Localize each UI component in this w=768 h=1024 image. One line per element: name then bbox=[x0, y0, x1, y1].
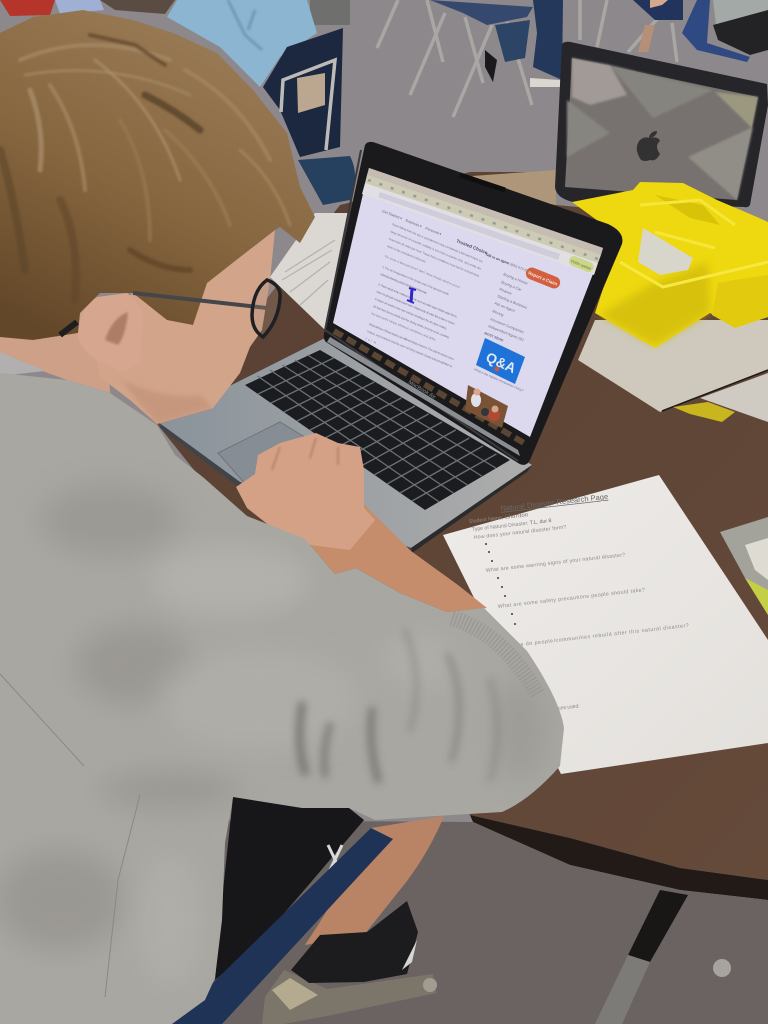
sleeve cuff ribbing bbox=[452, 618, 538, 695]
icon: apple logo bbox=[637, 131, 660, 161]
black shorts bbox=[215, 797, 364, 980]
gray hoodie bbox=[0, 373, 564, 1024]
article body text: to form, and moisture and the warm air rising causes clouds and precipitation to bbox=[367, 329, 453, 369]
browser tab strip bbox=[365, 175, 601, 263]
article body text: 2. There needs to be moisture in the air, such as water vapor. Water vapor forms bbox=[378, 282, 458, 319]
chair metal leg bbox=[262, 970, 437, 1024]
button: report a claim bbox=[524, 266, 562, 290]
article body text: to be below freezing, which is 32 degrees Fahrenheit. bbox=[380, 272, 427, 295]
reflection strip along lower bezel bbox=[334, 331, 524, 443]
background chairs and people bbox=[0, 0, 768, 205]
text cursor icon bbox=[407, 288, 416, 303]
sidebar menu: Starting a Business bbox=[497, 294, 528, 310]
Q&A caption: What is the Highest Homeowner Policy? bbox=[474, 367, 524, 393]
laptop base bbox=[158, 338, 532, 548]
worksheet bullets bbox=[485, 543, 516, 625]
worksheet: natural disaster research page bbox=[443, 475, 768, 774]
white whiteboard under caddy bbox=[578, 320, 768, 422]
website logo: Trusted Choice bbox=[456, 238, 489, 256]
Q&A card: Q&A bbox=[484, 349, 519, 376]
hair strands bbox=[0, 35, 290, 300]
worksheet fields and questions: What are some warning signs of your natural disaster? bbox=[486, 552, 625, 574]
article body text: more than 35 miles per hour. These three conditions must last for at least three bbox=[388, 237, 480, 278]
worksheet fields and questions: What are some safety precautions people should take? bbox=[498, 587, 645, 610]
eyeglasses bbox=[60, 280, 280, 337]
boy's forearm and hand bbox=[236, 433, 487, 612]
phone line: Talk to an agent (800) 873-8371 bbox=[485, 252, 532, 275]
article body text: For snow a blizzard form? Well, three things need to occur: bbox=[384, 254, 461, 290]
laptop lid and bezel bbox=[324, 142, 622, 465]
open book under laptop bbox=[270, 213, 348, 330]
sidebar menu: Moving bbox=[492, 309, 504, 317]
hoodie seams bbox=[0, 674, 140, 997]
boy's bare leg bbox=[305, 816, 444, 945]
boy's short brown hair bbox=[0, 10, 315, 340]
sidebar menu: Buying a Car bbox=[501, 280, 523, 292]
browser address bar bbox=[362, 183, 598, 275]
boy's neck bbox=[0, 300, 110, 393]
worksheet fields and questions: How do people/communities rebuild after this natural disaster? bbox=[512, 623, 689, 649]
card in caddy bbox=[638, 228, 693, 275]
laptop screen bbox=[333, 168, 603, 437]
shorts logo bbox=[328, 845, 342, 872]
yellow supply caddy bbox=[572, 182, 768, 348]
brand label: MacBook Air bbox=[407, 380, 437, 401]
trackpad bbox=[218, 422, 352, 503]
hoodie shading patches bbox=[0, 485, 545, 997]
article thumbnail photo bbox=[465, 385, 508, 428]
button: green update: Finish update bbox=[570, 259, 592, 271]
black sneaker bbox=[291, 901, 418, 983]
article body text: Air that rises forms clouds and the strong winds carry the snow, creating bbox=[373, 304, 450, 340]
boy's face bbox=[77, 230, 275, 424]
sidebar menu bbox=[484, 272, 528, 343]
closed laptop in protective case bbox=[555, 42, 768, 207]
worksheet fields and questions: Type of Natural Disaster: T.L. dur 8 bbox=[472, 518, 552, 533]
article body text: 3. Warm air needs to rise over cold air, resulting in the air vapor cooling. bbox=[374, 297, 447, 331]
worksheet fields and questions: Sources used: bbox=[548, 703, 580, 713]
sidebar menu: Buying a House bbox=[503, 272, 528, 286]
sidebar menu: Ask an Agent bbox=[494, 301, 515, 313]
button: report a claim: Report a Claim bbox=[528, 270, 558, 287]
sidebar menu: Finance bbox=[499, 287, 512, 296]
table leg bbox=[595, 890, 731, 1024]
worksheet title: Natural Disaster Research Page bbox=[500, 492, 609, 513]
keyboard bbox=[245, 350, 510, 510]
ear bbox=[77, 293, 143, 372]
article body text: 1. The air temperature in the clouds and in the ground needs bbox=[382, 265, 450, 296]
Q&A card bbox=[476, 338, 525, 384]
sidebar menu: MOST READ bbox=[484, 331, 504, 343]
floor under the table bbox=[150, 820, 768, 1024]
article body text: Snow falling from the sky is considered to only considered a blizzard if there are bbox=[392, 222, 483, 264]
sleeve folds bbox=[300, 630, 498, 780]
sidebar menu: Independent Agent 101 bbox=[488, 324, 524, 342]
article body text: form. bbox=[365, 337, 379, 346]
article body text: the blizzard's heavy whiteout conditions and drifts. bbox=[371, 311, 437, 342]
round table top bbox=[150, 170, 768, 900]
blue chair seat frame bbox=[171, 828, 393, 1024]
article body text: when moving air masses pass over a large body of water, like a lake or ocean. bbox=[376, 289, 456, 326]
worksheet fields and questions: How does your natural disaster form? bbox=[474, 524, 567, 541]
open laptop bbox=[158, 142, 622, 553]
article body text bbox=[365, 222, 483, 378]
browser menu bar bbox=[367, 168, 603, 255]
article body text: What all three of these factors are different kinds of storms. The cold air causes snow bbox=[369, 322, 455, 362]
website navigation: Get Started ▾ Business ▾ Personal ▾ bbox=[382, 209, 442, 236]
inner lining of hood at neck bbox=[0, 352, 45, 376]
chair legs behind table bbox=[377, 0, 677, 117]
worksheet fields and questions bbox=[468, 511, 689, 713]
sidebar menu: Insurance Companies bbox=[490, 317, 525, 334]
button: green update bbox=[567, 255, 595, 274]
article body text: hours to be considered a blizzard. bbox=[387, 244, 427, 264]
worksheet fields and questions: Student Name: Charlton bbox=[468, 511, 528, 525]
article body text: large amounts of snowfall, visibility is less than a quarter mile, and winds are bbox=[390, 229, 482, 271]
green and gray book on table bbox=[720, 517, 768, 615]
